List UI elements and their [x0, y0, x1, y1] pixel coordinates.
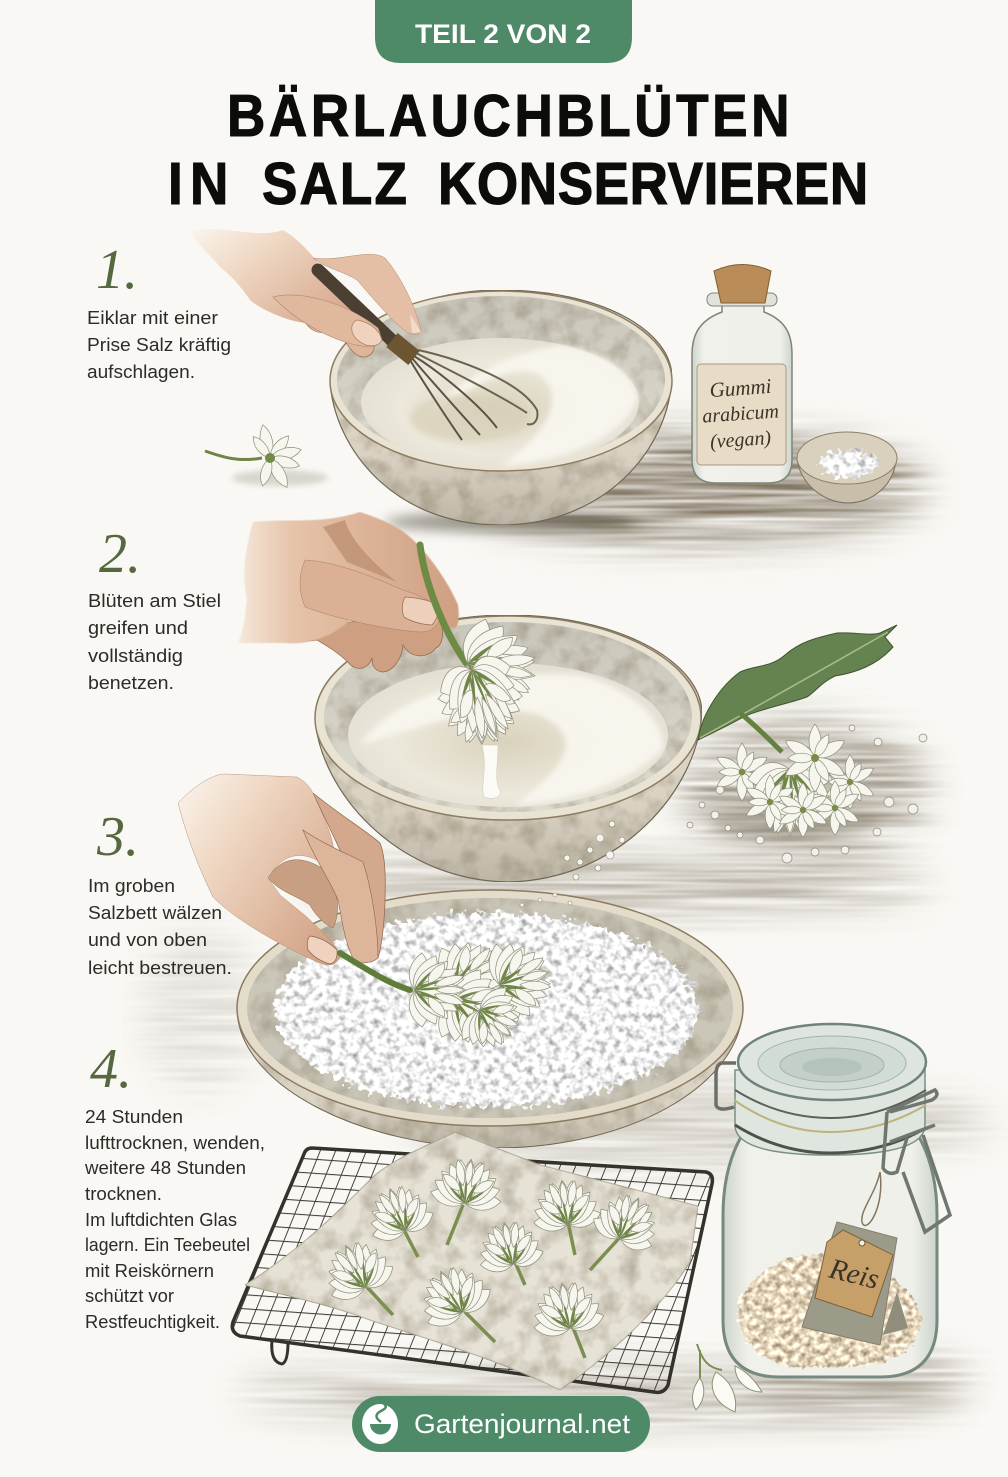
step 2 text: vollständig — [88, 645, 183, 666]
step 4 text: lagern. Ein Teebeutel — [85, 1234, 250, 1255]
title: BÄRLAUCHBLÜTEN — [227, 82, 790, 149]
back finger — [313, 793, 385, 958]
step 2 text: Blüten am Stiel — [88, 590, 221, 611]
palm — [190, 229, 362, 338]
dipped blossom — [420, 545, 544, 751]
plate with salt bed — [237, 890, 743, 1148]
hand 3 — [178, 774, 385, 965]
title — [168, 82, 868, 217]
step 4 text: 4. — [90, 1038, 132, 1100]
dried blossoms — [314, 1154, 669, 1358]
falling salt — [520, 821, 625, 907]
clasp — [716, 1063, 736, 1109]
step 4 text: schützt vor — [85, 1285, 174, 1306]
palm and thumb — [178, 774, 340, 965]
step 1 text: 1. — [96, 239, 138, 301]
step 3 text: leicht bestreuen. — [88, 957, 232, 978]
rolled blossom — [340, 925, 560, 1063]
leaf — [698, 625, 897, 740]
step 4 text: trocknen. — [85, 1183, 162, 1204]
icon: sprout in bowl — [362, 1403, 398, 1444]
flower 1 — [205, 423, 328, 490]
bottle — [692, 264, 792, 483]
label — [697, 364, 786, 465]
neck and lid — [735, 1070, 925, 1155]
step 1 text: Prise Salz kräftig — [87, 334, 231, 355]
step 2 text: greifen und — [88, 617, 188, 638]
table wood texture — [140, 433, 990, 1425]
step 4 text: weitere 48 Stunden — [84, 1157, 246, 1178]
label: arabicum — [702, 400, 780, 428]
thumb — [273, 295, 381, 347]
handle — [318, 270, 400, 348]
step 2 text — [88, 523, 221, 693]
parchment paper — [245, 1132, 698, 1390]
palm hollow — [323, 520, 397, 582]
step 4 text — [84, 1038, 265, 1332]
label: Gummi — [709, 374, 772, 402]
label: (vegan) — [709, 427, 772, 453]
small salt bowl — [797, 432, 897, 503]
jar — [716, 1024, 950, 1377]
cooling rack — [232, 1148, 712, 1392]
step 2 text: benetzen. — [88, 672, 174, 693]
tag Reis: Reis — [825, 1252, 882, 1296]
hand 2 — [238, 512, 459, 672]
step 3 text — [88, 806, 232, 978]
hand 1 — [190, 229, 421, 358]
footer logo pill — [352, 1396, 650, 1452]
tea bag — [802, 1222, 897, 1345]
egg white — [348, 663, 668, 807]
step 2 text: 2. — [99, 523, 141, 585]
step 4 text: lufttrocknen, wenden, — [85, 1132, 265, 1153]
tag Reis — [815, 1230, 893, 1317]
curled fingers — [268, 860, 338, 928]
step 1 text: aufschlagen. — [87, 361, 195, 382]
step 1 text: Eiklar mit einer — [87, 307, 218, 328]
top badge: TEIL 2 VON 2 — [415, 19, 591, 49]
title: SALZ — [262, 150, 407, 217]
lower fingers — [305, 310, 374, 357]
lower fingers — [300, 620, 443, 672]
thumb — [300, 560, 440, 632]
top badge — [375, 0, 632, 63]
step 4 text: Restfeuchtigkeit. — [85, 1311, 220, 1332]
index finger — [303, 830, 378, 963]
step 4 text: 24 Stunden — [85, 1106, 183, 1127]
step 4 text: Im luftdichten Glas — [85, 1209, 237, 1230]
string — [862, 1172, 881, 1225]
step 4 text: mit Reiskörnern — [85, 1260, 214, 1281]
footer logo pill: Gartenjournal.net — [414, 1409, 631, 1439]
step 3 text: 3. — [96, 806, 139, 868]
step 3 text: Salzbett wälzen — [88, 902, 222, 923]
salt bed — [275, 913, 699, 1107]
whisk — [410, 350, 537, 440]
scattered salt — [687, 725, 927, 863]
bowl 1 — [330, 290, 672, 532]
flower cluster — [710, 713, 880, 837]
title: IN — [168, 150, 228, 217]
title: KONSERVIEREN — [438, 150, 868, 217]
step 1 text — [87, 239, 231, 382]
palm — [238, 512, 459, 643]
snowdrop buds — [693, 1344, 762, 1412]
index finger — [313, 254, 421, 334]
bowl 2 — [315, 615, 702, 882]
step 3 text: und von oben — [88, 929, 207, 950]
step 3 text: Im groben — [88, 875, 175, 896]
egg white foam — [361, 338, 639, 466]
rice — [737, 1254, 923, 1367]
